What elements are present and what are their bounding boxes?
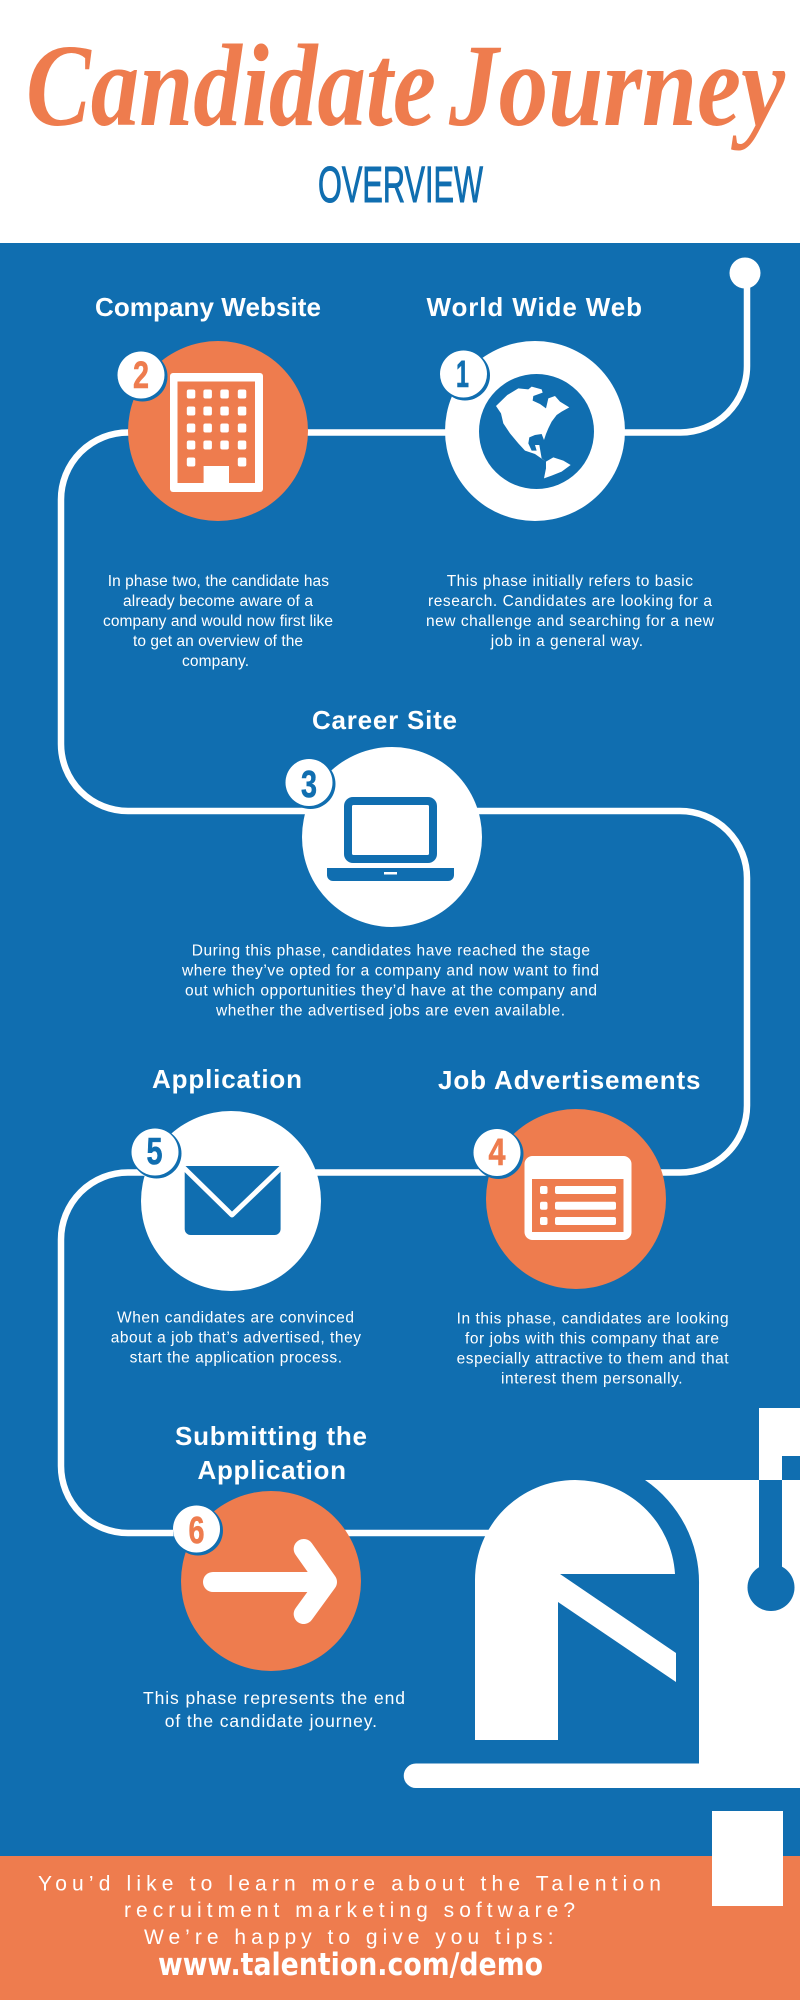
description [143,1688,405,1731]
description: especially attractive to them and that [457,1351,729,1368]
icon: globe [445,341,625,521]
heading: Submitting the [175,1421,367,1451]
subtitle: OVERVIEW [318,156,483,213]
mailbox body and base [404,1480,800,1788]
badge 1: 1 [456,354,469,396]
description: company and would now first like [103,613,333,630]
step 4: Job Advertisements [438,1065,729,1388]
badge 5: 5 [146,1131,162,1173]
icon: envelope [141,1111,321,1291]
description: company. [182,653,249,670]
journey path line [61,258,760,1533]
description: In this phase, candidates are looking [457,1311,729,1328]
badge 4 [474,1129,524,1179]
step 6: Submitting the Application [143,1421,405,1731]
heading: Application [152,1064,302,1094]
description [103,573,333,670]
description [111,1310,361,1367]
heading: World Wide Web [426,292,642,322]
description [181,943,599,1020]
mailbox illustration [404,1408,800,1906]
heading: Job Advertisements [438,1065,700,1095]
badge 1 [440,350,490,400]
description: In phase two, the candidate has [108,573,329,590]
icon: arrow [181,1491,361,1671]
step 2: Company Website [95,292,333,670]
description: research. Candidates are looking for a [428,593,712,610]
description: whether the advertised jobs are even available. [215,1003,565,1020]
icon: building [128,341,308,521]
heading: Application [198,1455,346,1485]
mailbox door [475,1480,676,1740]
footer call to action: We’re happy to give you tips: [144,1926,554,1949]
description: During this phase, candidates have reached the stage [192,943,590,960]
heading [175,1421,367,1485]
footer call to action: You’d like to learn more about the Talention [38,1873,661,1896]
badge 2: 2 [133,355,149,397]
description: This phase initially refers to basic [447,573,693,590]
description: When candidates are convinced [117,1310,354,1327]
badge 5 [132,1128,182,1178]
badge 6: 6 [188,1510,204,1552]
icon: job listing [486,1109,666,1289]
description: already become aware of a [123,593,313,610]
title [26,20,786,151]
mailbox flag [759,1408,800,1480]
title: Candidate [26,20,436,151]
badge 3 [286,759,336,809]
description: job in a general way. [490,633,643,650]
description: out which opportunities they’d have at the company and [185,983,597,1000]
description: interest them personally. [501,1371,683,1388]
step 1: World Wide Web [426,292,715,650]
mailbox flag pole [748,1480,794,1611]
description: This phase represents the end [143,1688,405,1708]
footer URL: www.talention.com/demo [158,1947,543,1983]
icon: laptop [302,747,482,927]
description: of the candidate journey. [165,1711,377,1731]
badge 2 [118,352,168,402]
step 5: Application [111,1064,361,1367]
description: new challenge and searching for a new [426,613,715,630]
description [457,1311,729,1388]
description: to get an overview of the [133,633,303,650]
footer call to action [38,1873,661,1983]
description [426,573,715,650]
badge 6 [173,1506,223,1556]
footer call to action: recruitment marketing software? [124,1899,575,1922]
mailbox post [712,1811,783,1906]
description: where they’ve opted for a company and now want to find [181,963,599,980]
badge 4: 4 [488,1132,506,1174]
description: for jobs with this company that are [465,1331,719,1348]
description: about a job that’s advertised, they [111,1330,361,1347]
step 3: Career Site [181,705,599,1020]
heading: Career Site [312,705,457,735]
heading: Company Website [95,292,321,322]
description: start the application process. [130,1350,342,1367]
badge 3: 3 [301,764,317,806]
